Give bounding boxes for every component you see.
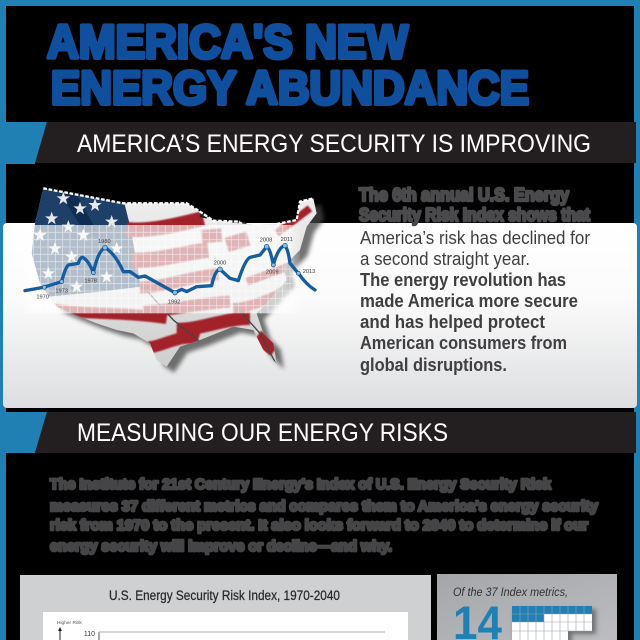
year labels: 2013: [303, 269, 315, 275]
text block: index finding: The energy revolution has: [360, 269, 566, 290]
text block: index description: energy security will improve or decline—and why.: [50, 538, 392, 555]
text block: index description: [50, 476, 599, 555]
text block: index finding: America’s risk has declined for: [360, 227, 590, 248]
banner: measuring our energy risks: MEASURING OUR ENERGY RISKS: [77, 419, 448, 447]
panel: 14 of 37 metrics: [437, 574, 617, 640]
line markers: [42, 243, 300, 295]
year labels: 1992: [168, 300, 180, 306]
text block: index finding: and has helped protect: [360, 311, 545, 332]
year labels: 1978: [84, 279, 97, 285]
heading: index name on black: The 6th annual U.S. Energy: [359, 184, 570, 205]
year labels: 2011: [281, 237, 293, 243]
year labels: 2009: [266, 269, 279, 275]
banner: America's energy security is improving: AMERICA’S ENERGY SECURITY IS IMPROVING: [77, 130, 591, 158]
text block: index description: risk from 1970 to the present. It also looks forward to 2040 to determine if our: [50, 517, 588, 534]
title: ENERGY ABUNDANCE: [51, 61, 529, 114]
chart area: [43, 612, 408, 640]
text block: index description: The Institute for 21st Century Energy’s Index of U.S. Energy Security Risk: [50, 476, 552, 493]
banner: America's energy security is improving: [0, 122, 636, 164]
risk index line: [25, 246, 315, 293]
metrics caption: Of the 37 Index metrics,: [453, 585, 568, 599]
text block: index finding: global disruptions.: [360, 354, 507, 375]
text block: index description: measures 37 different metrics and compares them to America’s energy security: [50, 498, 599, 515]
panel: energy security summary: [3, 223, 637, 408]
waffle icon: metric squares: [512, 606, 596, 640]
year labels: 1973: [55, 289, 68, 295]
text block: index finding: American consumers from: [360, 332, 567, 353]
year labels: 1970: [36, 294, 49, 300]
text block: index finding: a second straight year.: [360, 248, 530, 269]
grid overlay: [23, 225, 300, 313]
panel: risk index chart: [20, 575, 431, 640]
map white torn edge: [43, 188, 313, 224]
title: AMERICA'S NEW: [47, 15, 409, 68]
title: [47, 15, 529, 114]
year labels: 2008: [260, 237, 272, 243]
map: US flag map with risk line: [23, 183, 327, 373]
map shadow: [39, 194, 324, 373]
heading: index name on black: Security Risk Index shows that: [359, 205, 590, 225]
chart area: Higher Risk: [57, 620, 82, 626]
flag-textured US map: [27, 183, 327, 370]
year labels: 2000: [214, 260, 226, 266]
year labels: [36, 237, 315, 306]
chart title: U.S. Energy Security Risk Index, 1970-2040: [109, 588, 340, 603]
text block: index finding: [359, 184, 590, 375]
chart area: 110: [84, 631, 95, 638]
banner: measuring our energy risks: [0, 412, 636, 453]
year labels: 1980: [98, 239, 111, 245]
text block: index finding: made America more secure: [360, 290, 578, 311]
heading: index name on black: [359, 184, 590, 225]
